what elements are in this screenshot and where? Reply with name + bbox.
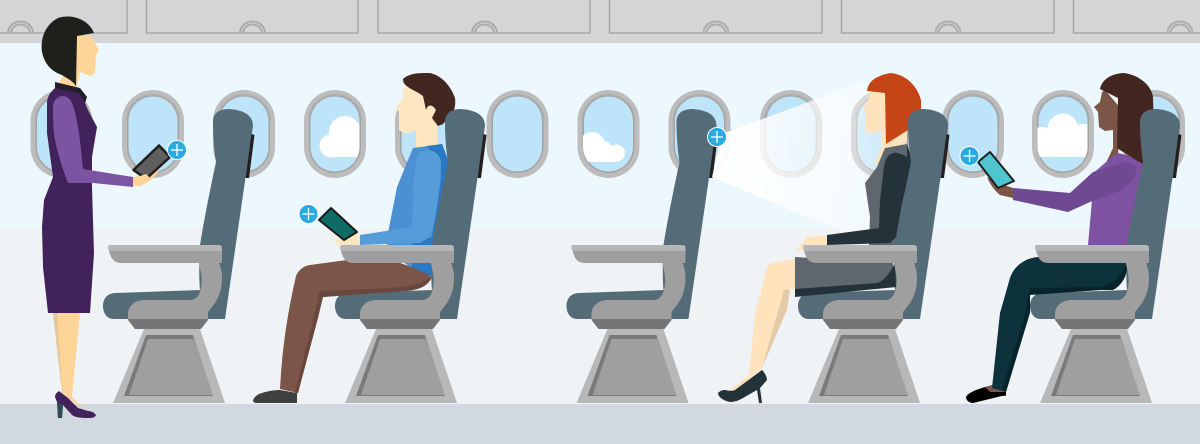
person: man torso and head xyxy=(360,73,455,277)
person: redhead torso and head xyxy=(827,73,921,245)
seat 1 armrest and base xyxy=(108,245,225,403)
seat 1 back xyxy=(103,109,254,319)
seat 2 back xyxy=(335,109,486,319)
clouds in windows xyxy=(320,114,1097,162)
floor xyxy=(0,404,1200,444)
cabin wall upper xyxy=(0,43,1200,228)
man legs, arm and tablet xyxy=(253,208,432,403)
cabin wall lower xyxy=(0,228,1200,404)
reading light beam xyxy=(712,80,886,240)
seat 4 back xyxy=(798,109,950,319)
seat 5 back xyxy=(1030,109,1182,319)
woman legs, arm and tablet xyxy=(966,152,1136,403)
icon: plus hotspot man tablet xyxy=(299,204,318,224)
seat 5 armrest and base xyxy=(1035,245,1152,403)
windows row xyxy=(30,90,1185,178)
seat 3 armrest and base xyxy=(572,245,688,403)
seat 2 armrest and base xyxy=(340,245,457,403)
icon: plus hotspot woman tablet xyxy=(960,146,979,166)
seat 3 back xyxy=(566,109,718,319)
seat 4 armrest and base xyxy=(803,245,920,403)
redhead legs, arm xyxy=(718,236,896,403)
icon: plus hotspot seat screen xyxy=(708,128,726,146)
person: flight attendant xyxy=(42,17,170,418)
person: woman with purple top torso and head xyxy=(1070,73,1154,245)
icon: plus hotspot attendant tablet xyxy=(168,140,186,160)
overhead bins xyxy=(0,0,1200,43)
